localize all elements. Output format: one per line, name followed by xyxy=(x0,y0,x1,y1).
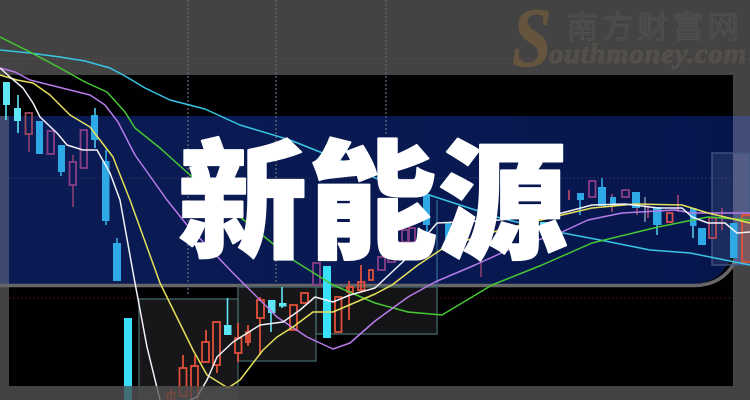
watermark chinese name: 南方财富网 xyxy=(567,10,743,45)
watermark domain: outhmoney.com xyxy=(549,38,747,70)
chart: candlesticks behind title xyxy=(378,195,550,277)
chart: candlesticks rebound section xyxy=(168,263,373,400)
title: 新能源 xyxy=(178,99,568,286)
chart: candlesticks right section xyxy=(569,178,750,262)
bottom frame strip xyxy=(0,386,750,400)
line: white average falling xyxy=(0,68,160,400)
line: blue long average xyxy=(0,50,750,265)
grid: dotted lines xyxy=(0,0,750,298)
panel: navy title band xyxy=(0,116,750,286)
line: purple average xyxy=(0,68,750,349)
watermark: southmoney logo xyxy=(512,0,747,84)
line: green average xyxy=(0,37,750,315)
panel: highlighted range boxes xyxy=(139,153,750,400)
line: yellow average xyxy=(0,75,750,388)
panel: black chart area xyxy=(0,75,733,386)
chart: candlesticks left falling section xyxy=(3,82,132,400)
line: white average rebound xyxy=(190,204,750,400)
